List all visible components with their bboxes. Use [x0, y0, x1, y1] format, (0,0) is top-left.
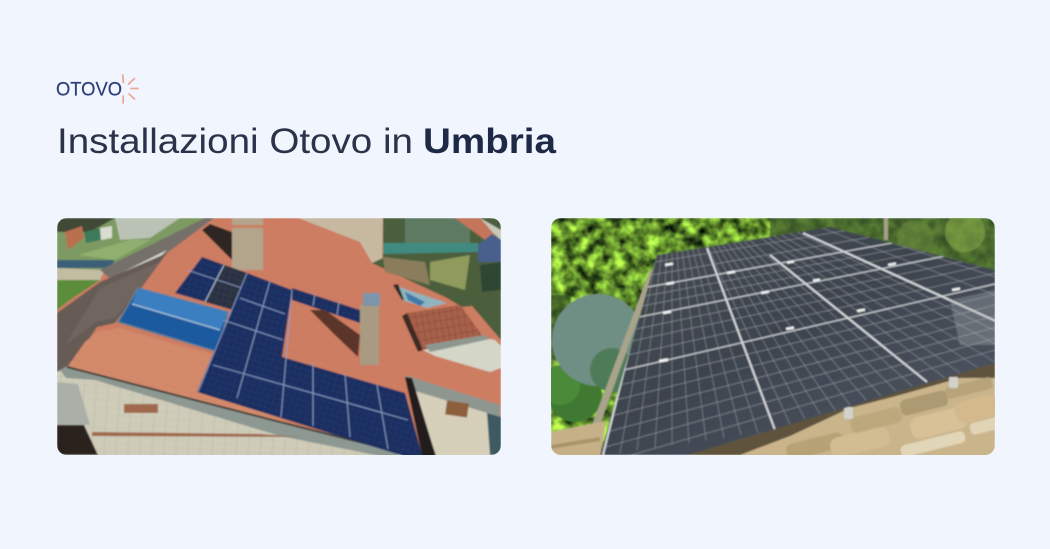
logo: Otovo [56, 75, 138, 103]
large chimney [232, 218, 263, 270]
logo wordmark: OTOVO [56, 78, 122, 100]
small chimney with shadow [310, 293, 380, 365]
gutter [592, 270, 655, 425]
frame clips [659, 260, 960, 363]
background buildings top right [298, 218, 383, 265]
icon: sun rays [123, 75, 138, 103]
PV array [600, 226, 995, 455]
foliage [540, 212, 995, 455]
sky reflection [950, 290, 995, 345]
photo: roof with blue solar panels [57, 218, 501, 460]
small red-tiled roof [402, 305, 484, 352]
main PV array [197, 273, 423, 458]
roof base [57, 218, 501, 455]
stone wall lower left [57, 370, 404, 455]
shadow beside chimney [202, 224, 234, 262]
terracotta lower right [418, 350, 420, 352]
left window shadow [57, 425, 98, 455]
photo: dark solar panels among trees [551, 218, 995, 455]
cell lines, cross-slope [602, 230, 995, 455]
title: Installazioni Otovo in [57, 121, 413, 161]
lower left tiled roof [68, 328, 284, 422]
roof tiles bottom left [551, 421, 606, 458]
upper PV array [175, 257, 247, 310]
white terrace [423, 338, 501, 372]
grey-brown roof [57, 253, 167, 372]
terracotta slope right [462, 306, 501, 350]
mounting clips [844, 407, 853, 419]
title: Umbria [423, 121, 556, 161]
skylight [393, 284, 447, 308]
module frames down-slope [603, 233, 1000, 455]
cell lines, down-slope [619, 227, 995, 454]
garden top right [372, 218, 501, 345]
grey fascia [60, 366, 400, 460]
grey ridge wall [100, 218, 214, 280]
roof tiles bottom right [690, 363, 995, 455]
garden top left [57, 218, 206, 310]
solar thermal panels [118, 288, 228, 352]
gable wall bottom right [405, 375, 501, 460]
module joints across [624, 242, 995, 372]
